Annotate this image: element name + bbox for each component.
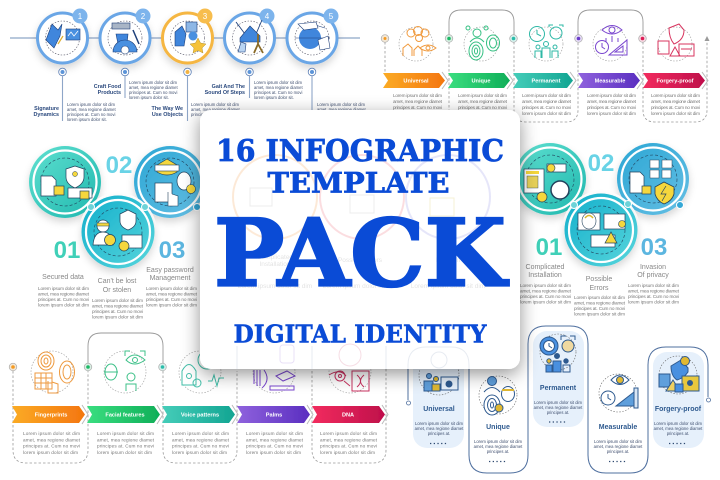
- captions: Or stolen: [103, 287, 131, 294]
- step 1 Signature Dynamics: 1: [78, 12, 83, 21]
- circle 02 invasion of privacy: [617, 143, 689, 215]
- lorem text columns: principes at. Cum no movi: [651, 105, 700, 110]
- lorem text columns: Lorem ipsum dolor sit dim: [172, 431, 229, 436]
- labels: Lorem ipsum dolor sit dim: [474, 439, 522, 444]
- lorem text columns: Lorem ipsum dolor sit dim: [651, 93, 700, 98]
- captions: principes at. Cum no movi: [92, 309, 143, 314]
- step 1 Signature Dynamics: amet, mea regione diamet: [67, 107, 116, 112]
- step 3 The Way We Use Objects: Use Objects: [152, 112, 183, 118]
- numbers: 03: [159, 237, 185, 264]
- chevron bars: DNA: [342, 412, 354, 418]
- lorem text columns: amet, mea regione diamet: [458, 99, 508, 104]
- lorem text columns: lorem ipsum dolor sit dim: [587, 111, 636, 116]
- faint captions: [238, 254, 485, 290]
- subtitle: DIGITAL IDENTITY: [234, 320, 487, 348]
- step 3 The Way We Use Objects: The Way We: [152, 106, 183, 112]
- circle 03 possible errors: [562, 191, 640, 269]
- step 4 Gait And The Sound Of Steps: 4: [265, 12, 270, 21]
- lorem text columns: lorem ipsum dolor sit dim: [246, 450, 301, 455]
- captions: Possible: [586, 276, 612, 283]
- panel: bottom-right pill columns: [406, 326, 710, 473]
- labels: amet, mea regione diamet: [654, 426, 703, 431]
- panel: top-right chevron process: [381, 10, 710, 122]
- step 3 The Way We Use Objects: 3: [203, 12, 208, 21]
- step 1 Signature Dynamics: Lorem ipsum dolor sit dim: [67, 102, 115, 107]
- step 4 Gait And The Sound Of Steps: Gait And The: [212, 84, 245, 90]
- circle 03 lost or stolen: [79, 193, 157, 271]
- captions: Lorem ipsum dolor sit dim: [38, 286, 89, 291]
- icon: voice patterns: [179, 351, 224, 393]
- captions: Easy password: [146, 267, 194, 274]
- icon: universal: [419, 355, 459, 395]
- step 3 The Way We Use Objects: principes at. Cum no movi: [191, 112, 239, 117]
- step 2 Craft Food Products: amet, mea regione diamet: [129, 85, 178, 90]
- icon: forgery-proof: [659, 356, 699, 394]
- lorem text columns: principes at. Cum no movi: [522, 105, 571, 110]
- step 4 Gait And The Sound Of Steps: Lorem ipsum dolor sit dim: [254, 80, 302, 85]
- lorem text columns: amet, mea regione diamet: [522, 99, 572, 104]
- captions: Installation: [528, 272, 562, 279]
- step 5: amet, mea regione diamet: [317, 107, 366, 112]
- lorem text columns: principes at. Cum no movi: [458, 105, 507, 110]
- labels: Universal: [423, 406, 455, 413]
- labels: Measurable: [599, 424, 637, 431]
- captions: Management: [150, 275, 190, 282]
- captions: principes at. Cum no movi: [574, 306, 625, 311]
- icon: DNA: [329, 351, 371, 393]
- labels: principes at.: [487, 449, 509, 454]
- lorem text columns: Lorem ipsum dolor sit dim: [587, 93, 636, 98]
- chevron bars: Universal: [403, 78, 429, 84]
- title line 1: 16 INFOGRAPHIC: [216, 134, 504, 169]
- icon: permanent: [540, 334, 576, 372]
- lorem text columns: principes at. Cum no movi: [393, 105, 442, 110]
- circle 02 password: [134, 146, 206, 218]
- captions: Can't be lost: [98, 278, 136, 285]
- labels: Lorem ipsum dolor sit dim: [415, 421, 463, 426]
- captions: [520, 264, 680, 316]
- captions: principes at. Cum no movi: [520, 294, 571, 299]
- numbers: [536, 150, 667, 261]
- numbers: [54, 152, 185, 264]
- labels: Lorem ipsum dolor sit dim: [654, 421, 702, 426]
- lorem text columns: lorem ipsum dolor sit dim: [522, 111, 571, 116]
- step 4 Gait And The Sound Of Steps: [205, 8, 303, 100]
- captions: Errors: [589, 285, 609, 292]
- chevron bars: Measurable: [595, 78, 625, 84]
- step 2 Craft Food Products: 2: [141, 12, 146, 21]
- faint see-through lower templates: [237, 344, 469, 369]
- connector nodes: [9, 363, 166, 371]
- captions: Invasion: [640, 264, 666, 271]
- step 2 Craft Food Products: [94, 8, 178, 100]
- step 3 The Way We Use Objects: [152, 8, 240, 121]
- lorem text columns: Lorem ipsum dolor sit dim: [246, 431, 303, 436]
- lorem text columns: lorem ipsum dolor sit dim: [97, 450, 152, 455]
- captions: Lorem ipsum dolor sit dim: [92, 298, 143, 303]
- lorem text columns: principes at. Cum no movi: [587, 105, 636, 110]
- lorem text columns: Lorem ipsum dolor sit dim: [458, 93, 507, 98]
- labels: principes at.: [428, 431, 450, 436]
- numbers: 02: [588, 150, 614, 177]
- step 1 Signature Dynamics: Dynamics: [34, 112, 59, 118]
- captions: lorem ipsum dolor sit dim: [628, 300, 679, 304]
- captions: amet, mea regione diamet: [520, 288, 572, 294]
- chevron bars: Palms: [266, 412, 282, 418]
- lorem text columns: principes at. Cum no movi: [320, 444, 377, 448]
- title PACK: PACK: [214, 198, 509, 308]
- step 3 The Way We Use Objects: Lorem ipsum dolor sit dim: [191, 102, 239, 107]
- lorem text columns: principes at. Cum no movi: [172, 444, 229, 448]
- lorem text columns: lorem ipsum dolor sit dim: [651, 111, 700, 116]
- captions: amet, mea regione diamet: [574, 300, 626, 306]
- step 5: Lorem ipsum dolor sit dim: [317, 102, 365, 107]
- lorem text columns: Lorem ipsum dolor sit dim: [23, 431, 80, 436]
- lorem text columns: Lorem ipsum dolor sit dim: [393, 93, 442, 98]
- title line 2: TEMPLATE: [268, 166, 450, 200]
- step 5: [287, 8, 366, 121]
- captions: lorem ipsum dolor sit dim: [146, 302, 197, 308]
- lorem text columns: [23, 431, 378, 455]
- chevron bars: Permanent: [532, 78, 561, 84]
- numbers: 03: [641, 234, 667, 261]
- captions: lorem ipsum dolor sit dim: [520, 300, 571, 304]
- labels: Lorem ipsum dolor sit dim: [594, 439, 642, 444]
- chevron bars: Voice patterns: [181, 412, 219, 418]
- lorem text columns: amet, mea regione diamet: [23, 438, 81, 442]
- step 2 Craft Food Products: Lorem ipsum dolor sit dim: [129, 80, 177, 85]
- chevron bars: [12, 405, 388, 424]
- step 1 Signature Dynamics: lorem ipsum dolor sit.: [67, 117, 107, 122]
- lorem text columns: [393, 93, 701, 116]
- faint background circles: [233, 155, 490, 239]
- step 2 Craft Food Products: Products: [98, 90, 121, 96]
- lorem text columns: amet, mea regione diamet: [587, 99, 637, 104]
- captions: principes at. Cum no movi: [38, 297, 89, 302]
- lorem text columns: amet, mea regione diamet: [246, 438, 304, 442]
- captions: Of privacy: [637, 272, 669, 279]
- icon: facial features: [104, 351, 146, 393]
- captions: amet, mea regione diamet: [38, 292, 90, 296]
- captions: Lorem ipsum dolor sit dim: [520, 283, 571, 288]
- step 3 The Way We Use Objects: amet, mea regione diamet: [191, 107, 240, 112]
- lorem text columns: lorem ipsum dolor sit dim: [320, 450, 375, 455]
- captions: Lorem ipsum dolor sit dim: [146, 286, 197, 291]
- step 4 Gait And The Sound Of Steps: Sound Of Steps: [205, 90, 245, 96]
- labels: amet, mea regione diamet: [534, 405, 583, 410]
- lorem text columns: lorem ipsum dolor sit dim: [23, 450, 78, 455]
- captions: principes at. Cum no movi: [628, 294, 679, 299]
- panel: right three circles: [514, 143, 689, 316]
- lorem text columns: Lorem ipsum dolor sit dim: [522, 93, 571, 98]
- lorem text columns: amet, mea regione diamet: [97, 438, 155, 442]
- faint captions: Lorem ipsum dolor sit dim: [238, 283, 312, 290]
- faint captions: Invasion: [436, 257, 460, 264]
- labels: [415, 385, 703, 462]
- captions: principes at. Cum no movi: [146, 297, 197, 302]
- icon: permanent family: [529, 25, 563, 61]
- faint captions: Complicated: [257, 254, 293, 261]
- icon: unique: [479, 376, 517, 415]
- labels: amet, mea regione diamet: [594, 444, 643, 449]
- labels: principes at.: [607, 449, 629, 454]
- chevron bars: [383, 72, 708, 89]
- labels: Unique: [486, 424, 510, 431]
- step 4 Gait And The Sound Of Steps: lorem ipsum dolor sit.: [254, 95, 294, 100]
- icon: unique fingerprint: [464, 26, 500, 61]
- faint captions: Possible Errors: [338, 257, 383, 264]
- icon: palms: [253, 351, 295, 393]
- faint captions: Installation: [259, 261, 291, 268]
- captions: lorem ipsum dolor sit dim: [574, 312, 625, 316]
- captions: Lorem ipsum dolor sit dim: [628, 283, 679, 288]
- step 4 Gait And The Sound Of Steps: amet, mea regione diamet: [254, 85, 303, 90]
- step 4 Gait And The Sound Of Steps: principes at. Cum no movi: [254, 90, 302, 95]
- captions: amet, mea regione diamet: [92, 304, 144, 308]
- step 2 Craft Food Products: Craft Food: [94, 84, 121, 90]
- icon: measurable: [599, 374, 638, 412]
- captions: amet, mea regione diamet: [628, 288, 680, 294]
- labels: Permanent: [540, 385, 577, 392]
- captions: amet, mea regione diamet: [146, 292, 198, 296]
- labels: principes at.: [667, 431, 689, 436]
- lorem text columns: Lorem ipsum dolor sit dim: [97, 431, 154, 436]
- lorem text columns: amet, mea regione diamet: [393, 99, 443, 104]
- step 2 Craft Food Products: principes at. Cum no movi: [129, 90, 177, 95]
- labels: amet, mea regione diamet: [474, 444, 523, 449]
- panel: left three circles: [29, 146, 206, 320]
- chevron bars: Unique: [472, 78, 490, 84]
- step 1 Signature Dynamics: principes at. Cum no movi: [67, 112, 115, 117]
- lorem text columns: principes at. Cum no movi: [246, 444, 303, 448]
- numbers: 01: [536, 234, 562, 261]
- labels: principes at.: [547, 410, 569, 415]
- chevron bars: Facial features: [105, 412, 145, 418]
- labels: Forgery-proof: [655, 406, 702, 413]
- step 1 Signature Dynamics: Signature: [34, 106, 59, 112]
- panel: top-left timeline: [10, 8, 366, 122]
- lorem text columns: amet, mea regione diamet: [651, 99, 701, 104]
- step 5: 5: [329, 12, 334, 21]
- icon: forgery shield: [658, 24, 694, 61]
- step 2 Craft Food Products: lorem ipsum dolor sit.: [129, 95, 169, 100]
- captions: Lorem ipsum dolor sit dim: [574, 295, 625, 300]
- captions: Secured data: [42, 274, 84, 281]
- circle 01 secured data: [29, 146, 101, 218]
- chevron bars: Forgery-proof: [657, 78, 694, 84]
- captions: lorem ipsum dolor sit dim: [38, 302, 89, 308]
- numbers: 02: [106, 152, 132, 179]
- panel: bottom-left chevron process: [9, 333, 388, 463]
- numbers: 01: [54, 237, 80, 264]
- lorem text columns: Lorem ipsum dolor sit dim: [320, 431, 377, 436]
- lorem text columns: amet, mea regione diamet: [172, 438, 230, 442]
- captions: [38, 267, 198, 320]
- connector nodes: [381, 35, 710, 42]
- icon: measurable: [593, 26, 627, 61]
- lorem text columns: principes at. Cum no movi: [97, 444, 154, 448]
- icon: universal people: [399, 26, 436, 61]
- labels: Lorem ipsum dolor sit dim: [534, 400, 582, 405]
- labels: amet, mea regione diamet: [415, 426, 464, 431]
- faint captions: Lorem ipsum dolor sit dim: [323, 283, 397, 290]
- lorem text columns: amet, mea regione diamet: [320, 438, 378, 442]
- icon: fingerprints: [31, 351, 74, 393]
- circle 01 complicated installation: [514, 143, 586, 215]
- panel: central title card: [200, 110, 520, 369]
- chevron bars: Fingerprints: [35, 412, 67, 418]
- faint captions: Lorem ipsum dolor sit dim: [411, 283, 485, 290]
- captions: lorem ipsum dolor sit dim: [92, 314, 143, 320]
- lorem text columns: principes at. Cum no movi: [23, 444, 80, 448]
- lorem text columns: lorem ipsum dolor sit dim: [172, 450, 227, 455]
- step 1 Signature Dynamics: [34, 8, 116, 122]
- captions: Complicated: [526, 264, 565, 271]
